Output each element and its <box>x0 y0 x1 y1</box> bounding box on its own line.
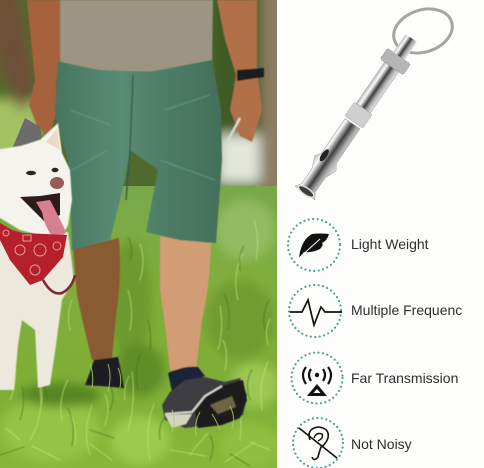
grey t-shirt <box>60 0 213 72</box>
feature: far transmission <box>292 352 458 404</box>
mouthpiece opening <box>297 183 316 199</box>
dog nose <box>50 177 64 189</box>
right sock <box>168 367 205 392</box>
knurled collar <box>345 102 372 128</box>
man's legs and shoes <box>73 236 247 428</box>
whistle slot <box>318 148 331 163</box>
dog eyes <box>26 171 36 175</box>
green shorts <box>55 60 222 250</box>
product: silver dog whistle with key ring <box>293 2 458 202</box>
right shoe <box>162 377 247 428</box>
dog body <box>0 232 74 390</box>
shoe sole <box>195 380 247 428</box>
man's arms <box>27 0 264 146</box>
red leash <box>43 275 75 293</box>
icon: crossed-out ear in dotted circle <box>293 418 343 468</box>
label: Far Transmission <box>351 370 458 386</box>
dog inner ear <box>46 129 60 150</box>
key ring <box>388 2 458 60</box>
right leg <box>160 236 211 370</box>
white dog <box>0 118 75 390</box>
icon: feather in dotted circle <box>288 219 340 271</box>
grass texture <box>0 220 270 466</box>
right arm and hand <box>217 0 262 142</box>
label: Multiple Frequency <box>351 302 469 318</box>
whistle body <box>293 30 423 202</box>
blurred park background <box>0 0 277 186</box>
left arm and hand <box>27 0 60 135</box>
upper tube <box>356 62 399 113</box>
icon: waveform in dotted circle <box>289 285 342 337</box>
grey object behind ear <box>12 118 42 149</box>
feature: light weight <box>288 219 429 271</box>
wristwatch <box>237 68 264 81</box>
left leg <box>73 238 120 360</box>
label: Not Noisy <box>351 436 412 452</box>
red bandana <box>0 223 67 285</box>
top stub <box>393 34 417 60</box>
grass over feet <box>90 364 234 436</box>
dog mouth <box>20 193 60 222</box>
label: Light Weight <box>351 236 429 252</box>
grass field <box>0 186 290 468</box>
icon: signal tower in dotted circle <box>292 352 342 404</box>
left shoe and sock <box>85 357 124 388</box>
feature: not noisy <box>293 418 412 468</box>
feature: multiple frequency <box>289 285 469 337</box>
dog head <box>0 123 72 240</box>
keychain in hand <box>227 116 242 142</box>
photo: man walking white dog on grass <box>0 0 300 468</box>
dog tongue <box>36 200 66 237</box>
grass light and dark patches <box>0 200 280 467</box>
upper collar <box>380 48 411 75</box>
